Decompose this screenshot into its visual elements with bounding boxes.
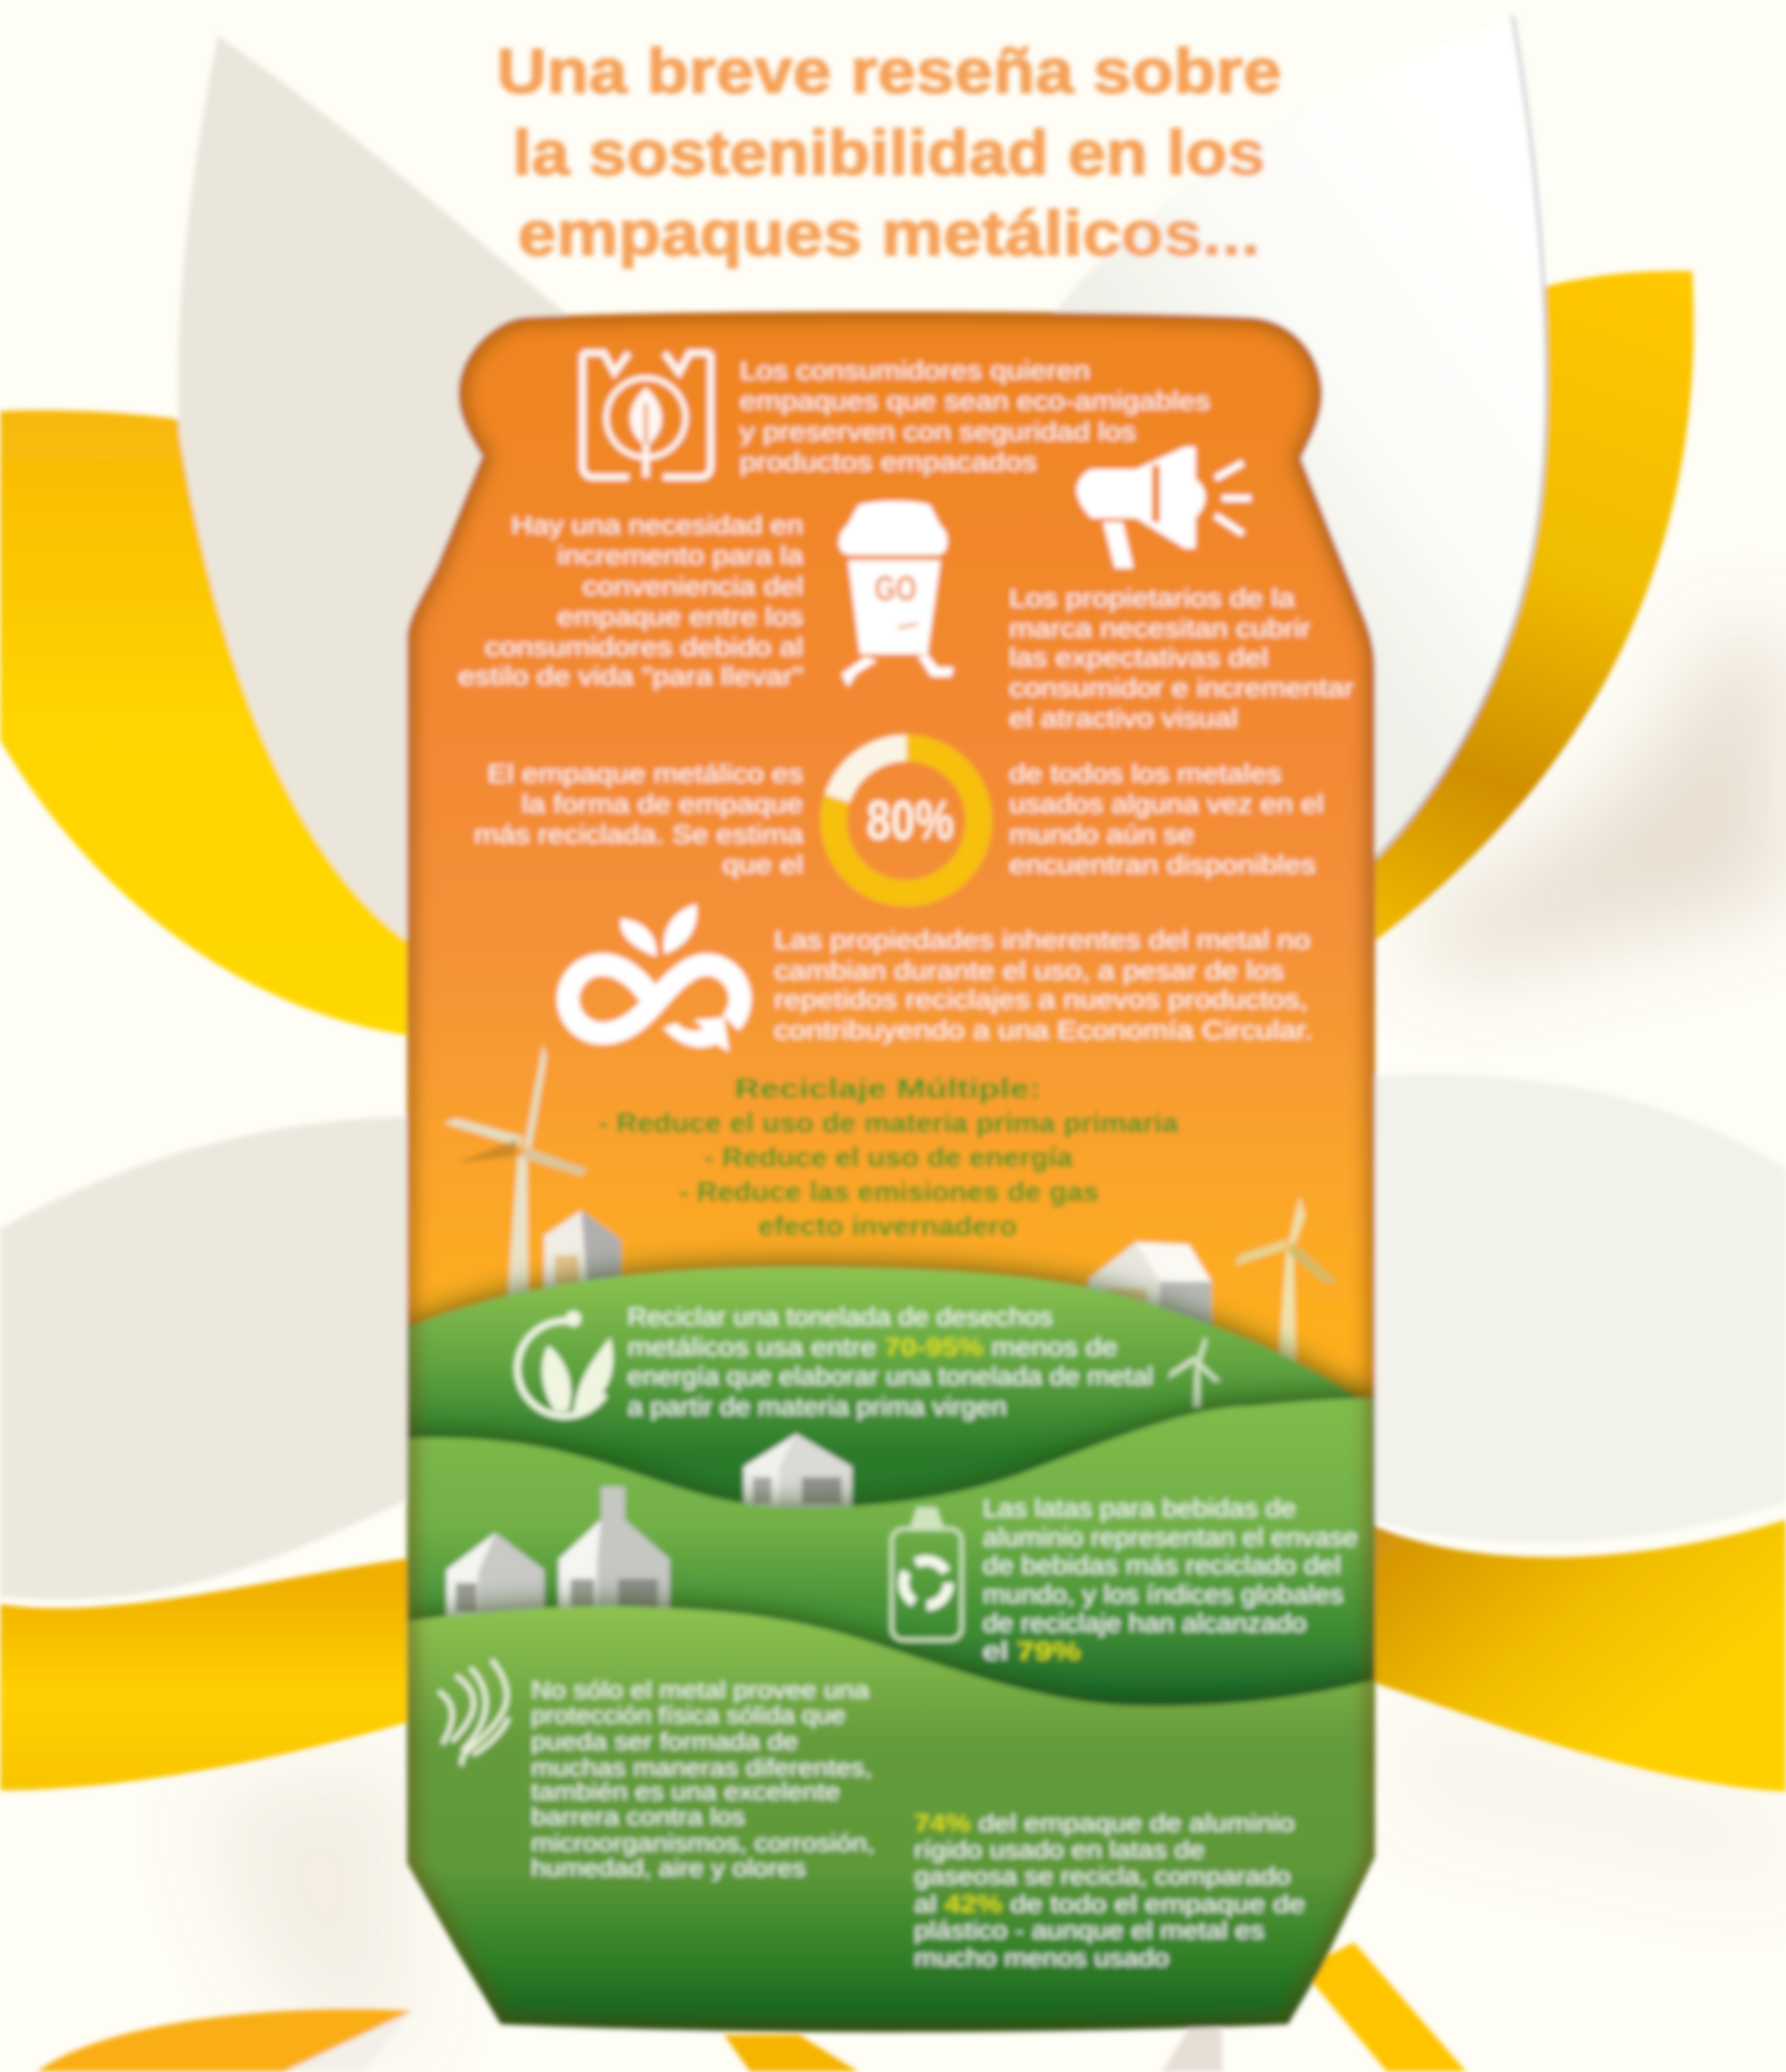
text: all metals [1009,760,1324,879]
text: energy savings: Reciclar una tonelada de desechos [627,1302,1053,1331]
white petal tip bottom left [284,2011,412,2072]
text: inherent properties: repetidos reciclajes a nuevos productos, [774,986,1308,1014]
text: all metals: encuentran disponibles [1009,851,1316,879]
yellow petal top left [0,410,422,1038]
beige leaf top left [178,36,595,952]
yellow petal top right [1360,271,1694,952]
title [497,35,1281,269]
text: consumers: y preserven con seguridad los [740,418,1136,446]
soft shadows [198,635,1786,2072]
text: aluminium cans: mundo, y los índices globales [983,1580,1343,1608]
house pair [447,1487,670,1623]
icon: megaphone [1076,447,1251,568]
yellow band lower right [1360,1519,1786,1792]
icon: eco bag [583,353,711,477]
text: physical protection: humedad, aire y olores [531,1855,806,1882]
off-white petal lower right [1360,1074,1786,1543]
white leaf top right [1050,16,1546,873]
text: rigid aluminium: gaseosa se recicla, comparado [914,1863,1291,1890]
title: empaques metálicos... [518,197,1260,269]
house centre [744,1433,852,1513]
text: multiple recycling [598,1074,1179,1242]
text: physical protection: muchas maneras diferentes, [531,1755,872,1781]
text: all metals: de todos los metales [1009,760,1281,788]
text: inherent properties [774,926,1313,1044]
windmill left [443,1044,588,1301]
small windmill [1168,1336,1220,1408]
text: need for convenience: empaque entre los [558,602,803,631]
text: aluminium cans: de reciclaje han alcanzado [983,1609,1306,1637]
text: all metals: mundo aún se [1009,821,1194,849]
text: rigid aluminium [914,1811,1305,1972]
text: aluminium cans: aluminio representan el envase [983,1523,1358,1552]
jar inner edge shading [407,312,1375,2032]
text: need for convenience: Hay una necesidad en [511,512,803,540]
text: brand owners: Los propietarios de la [1009,584,1296,612]
text: aluminium cans: Las latas para bebidas de [983,1494,1296,1522]
icon: air and moisture waves [439,1659,508,1765]
text: energy savings: metálicos usa entre 70-95% menos de [627,1333,1118,1361]
text: physical protection: microorganismos, corrosión, [531,1830,875,1857]
text: consumers [740,357,1210,476]
text: rigid aluminium: plástico - aunque el metal es [914,1917,1264,1944]
title: la sostenibilidad en los [512,117,1266,189]
text: brand owners: consumidor e incrementar [1009,673,1354,702]
leaf edge line [1374,16,1546,859]
beige petal lower left [0,1117,422,1599]
text: need for convenience: consumidores debido al [485,633,803,661]
yellow stem bottom centre [724,2035,859,2072]
text: rigid aluminium: al 42% de todo el empaque de [914,1891,1305,1917]
text: brand owners: el atractivo visual [1009,704,1238,732]
text: physical protection: pueda ser formada de [531,1728,798,1755]
icon: to-go cup: GO [875,569,917,607]
text: physical protection [531,1677,875,1882]
text: multiple recycling: Reciclaje Múltiple: [735,1074,1041,1105]
orange petal bottom left [37,2009,412,2072]
text: need for convenience: conveniencia del [583,572,803,601]
text: physical protection: No sólo el metal provee una [531,1677,870,1704]
text: brand owners: las expectativas del [1009,643,1268,672]
yellow band lower left [0,1556,422,1790]
text: rigid aluminium: mucho menos usado [914,1945,1169,1972]
text: inherent properties: Las propiedades inherentes del metal no [774,926,1310,954]
yellow stem bottom right [1301,1942,1466,2072]
text: brand owners: marca necesitan cubrir [1009,614,1310,643]
jar [397,312,1381,2061]
hill back [397,1267,1381,1586]
icon: recycled can [892,1509,961,1640]
text: consumers: productos empacados [740,448,1037,476]
text: multiple recycling: efecto invernadero [758,1211,1017,1242]
text: most recycled: la forma de empaque [522,790,803,818]
text: all metals: usados alguna vez en el [1009,790,1324,818]
donut chart: 80%: 80% [867,789,954,851]
text: need for convenience: estilo de vida "para llevar" [458,662,803,690]
windmill right [1235,1196,1337,1361]
text: inherent properties: cambian durante el uso, a pesar de los [774,957,1284,985]
text: need for convenience: incremento para la [558,541,804,570]
hill front [397,1606,1381,2061]
icon: infinity recycling [568,904,740,1052]
text: multiple recycling: - Reduce el uso de energía [704,1143,1073,1174]
house right [1088,1242,1211,1335]
text: multiple recycling: - Reduce el uso de materia prima primaria [598,1108,1179,1139]
text: physical protection: también es una excelente [531,1779,840,1806]
text: rigid aluminium: 74% del empaque de aluminio [914,1811,1295,1837]
text: need for convenience [458,512,804,690]
text: energy savings: energía que elaborar una tonelada de metal [627,1362,1153,1391]
text: aluminium cans [983,1494,1358,1665]
text: rigid aluminium: rígido usado en latas de [914,1836,1205,1863]
text: most recycled: más reciclada. Se estima [474,821,804,849]
hill middle [397,1398,1381,1771]
text: physical protection: protección física sólida que [531,1702,846,1729]
text: aluminium cans: el 79% [983,1637,1080,1665]
text: consumers: Los consumidores quieren [740,357,1090,385]
text: aluminium cans: de bebidas más reciclado del [983,1551,1341,1579]
text: brand owners [1009,584,1354,732]
donut chart: 80% [834,748,979,894]
text: most recycled: El empaque metálico es [487,760,803,788]
text: inherent properties: contribuyendo a una Economía Circular. [774,1016,1313,1044]
title: Una breve reseña sobre [497,35,1281,106]
text: physical protection: barrera contra los [531,1804,745,1831]
beige stem bottom [1163,2028,1222,2072]
text: most recycled [474,760,804,879]
icon: to-go cup [839,501,954,687]
jar clipped scenery [397,1044,1381,2061]
text: energy savings [627,1302,1153,1420]
icon: leaf cycle [517,1311,613,1416]
text: consumers: empaques que sean eco-amigables [740,387,1210,415]
text: multiple recycling: - Reduce las emisiones de gas [679,1177,1099,1208]
text: energy savings: a partir de materia prima virgen [627,1392,1007,1420]
jar body [407,312,1375,2032]
text: most recycled: que el [723,851,803,879]
house left [545,1210,621,1295]
